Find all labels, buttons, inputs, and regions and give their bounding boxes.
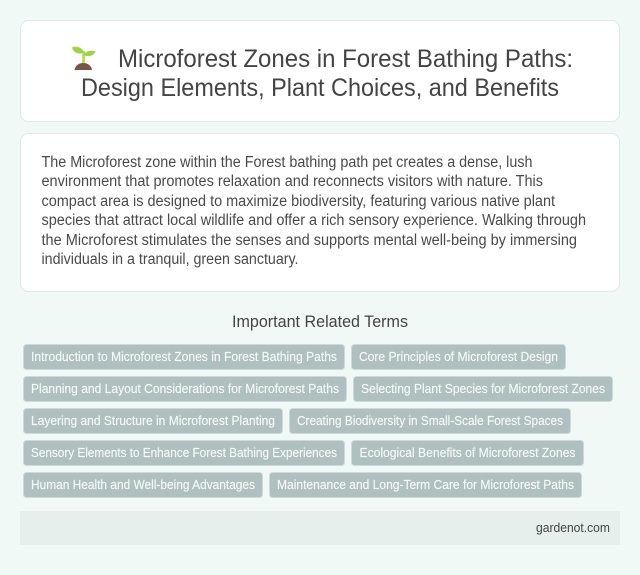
- tag: introduction: Introduction to Microforest Zones in Forest Bathing Paths: [31, 350, 337, 364]
- tag: sensory elements: [24, 440, 344, 466]
- tag: sensory elements: Sensory Elements to Enhance Forest Bathing Experiences: [31, 446, 337, 460]
- tag: creating biodiversity: [290, 408, 570, 434]
- tag: introduction: [24, 344, 344, 370]
- description paragraph: the Microforest stimulates the senses and supports mental well-being by immersing: [42, 232, 577, 249]
- tag: layering and structure: Layering and Structure in Microforest Planting: [31, 414, 275, 428]
- description paragraph: [42, 154, 586, 268]
- tag: maintenance: [270, 472, 582, 498]
- tag: layering and structure: [24, 408, 282, 434]
- description paragraph: species that attract local wildlife and offer a rich sensory experience. Walking through: [42, 212, 586, 229]
- tag: ecological benefits: [352, 440, 584, 466]
- panel: footer: [20, 511, 620, 545]
- tag: core principles: [352, 344, 566, 370]
- panel: description card: [20, 134, 620, 292]
- title line 2: Design Elements, Plant Choices, and Benefits: [81, 74, 559, 102]
- heading: important related terms: Important Related Terms: [232, 313, 408, 331]
- panel: title card: [20, 20, 620, 122]
- footer source text: gardenot.com: [536, 520, 610, 535]
- tag: selecting plant species: [354, 376, 612, 402]
- tag: planning and layout: [24, 376, 346, 402]
- tag: core principles: Core Principles of Microforest Design: [359, 350, 558, 364]
- tag: creating biodiversity: Creating Biodiversity in Small-Scale Forest Spaces: [297, 414, 563, 428]
- panel: related term tags: [24, 344, 612, 498]
- description paragraph: individuals in a tranquil, green sanctuary.: [42, 251, 298, 268]
- tag: selecting plant species: Selecting Plant Species for Microforest Zones: [361, 382, 605, 396]
- tag: ecological benefits: Ecological Benefits of Microforest Zones: [360, 446, 576, 460]
- description paragraph: environment that promotes relaxation and reconnects visitors with nature. This: [42, 173, 543, 190]
- description paragraph: compact area is designed to maximize biodiversity, featuring various native plant: [42, 193, 556, 210]
- tag: human health: Human Health and Well-being Advantages: [31, 478, 255, 492]
- icon: sprout: [72, 47, 96, 70]
- description paragraph: The Microforest zone within the Forest bathing path pet creates a dense, lush: [42, 154, 532, 171]
- title line 1: Microforest Zones in Forest Bathing Paths:: [118, 45, 573, 73]
- tag: planning and layout: Planning and Layout Considerations for Microforest Paths: [31, 382, 339, 396]
- tag: human health: [24, 472, 262, 498]
- tag: maintenance: Maintenance and Long-Term Care for Microforest Paths: [277, 478, 574, 492]
